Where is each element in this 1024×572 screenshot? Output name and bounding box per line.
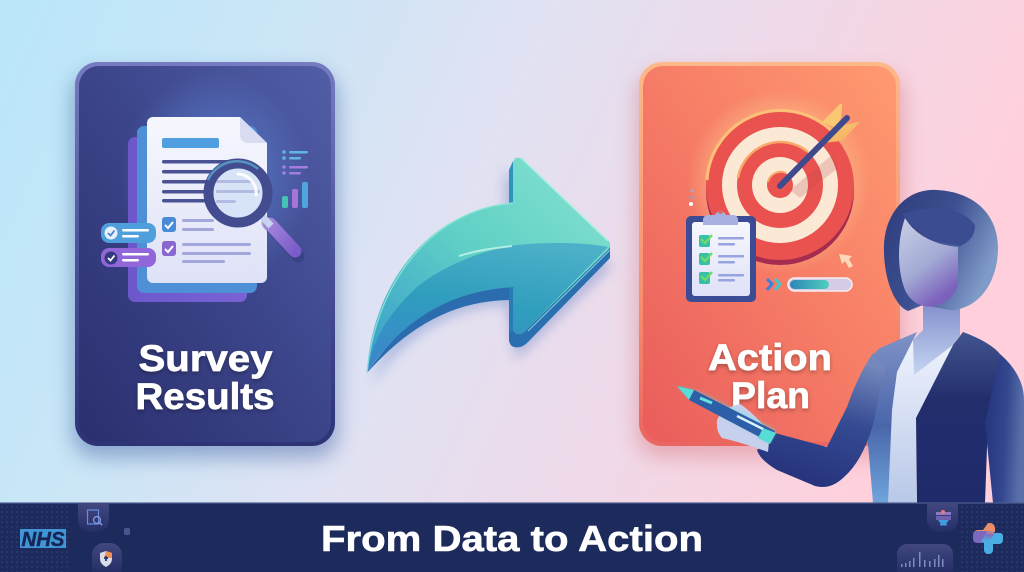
icon: status pills bbox=[101, 223, 156, 267]
title: From Data to Action bbox=[321, 518, 703, 559]
heading: survey results: Results bbox=[136, 376, 274, 417]
shirt bbox=[888, 340, 953, 503]
hand bbox=[717, 404, 770, 452]
arrow: data to action bbox=[367, 158, 612, 385]
icon: cursor arrow bbox=[839, 254, 853, 268]
icon tile: line chart bbox=[897, 544, 953, 572]
hair highlight bbox=[903, 208, 975, 246]
pen bbox=[677, 386, 776, 444]
hair back bbox=[884, 190, 998, 311]
icon: target with arrow bbox=[687, 90, 871, 274]
decorative dot bbox=[124, 528, 130, 535]
heading: action plan bbox=[708, 337, 832, 416]
heading: action plan: Plan bbox=[731, 375, 810, 416]
heading: survey results bbox=[136, 338, 274, 417]
footer bar bbox=[0, 502, 1024, 572]
logo: NHS: NHS bbox=[22, 529, 65, 551]
illustration: woman presenting bbox=[677, 190, 1024, 503]
right arm bbox=[985, 354, 1024, 503]
icon tile: monitor bbox=[927, 503, 958, 532]
right jacket panel bbox=[915, 332, 1000, 503]
icon tile: shield bbox=[92, 543, 122, 572]
icon: small markers bbox=[689, 188, 694, 206]
heading: survey results: Survey bbox=[138, 338, 273, 379]
left arm sleeve bbox=[757, 353, 885, 487]
logo: medical cross bbox=[973, 523, 1003, 554]
icon tile: table search bbox=[78, 503, 109, 532]
heading: action plan: Action bbox=[708, 337, 832, 378]
neck bbox=[913, 296, 960, 375]
panel: action plan bbox=[636, 62, 904, 458]
icon: chevrons and progress bar bbox=[767, 278, 852, 291]
panel: survey results bbox=[72, 62, 338, 458]
icon: document stack with magnifier bbox=[101, 70, 310, 302]
face bbox=[899, 218, 958, 307]
left torso and lapel bbox=[864, 332, 917, 503]
icon: clipboard checklist bbox=[686, 210, 756, 302]
icon: mini list and bar chart bbox=[282, 150, 308, 208]
